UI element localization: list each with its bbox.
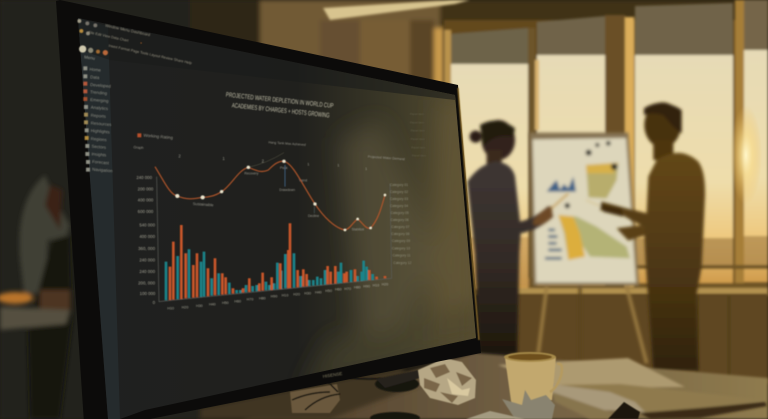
x axis labels: H40	[209, 303, 216, 307]
sidebar menu: Navigation	[92, 167, 113, 173]
x axis labels: H50	[222, 301, 229, 305]
x axis labels: H80	[354, 286, 361, 290]
right legend list: Category 05	[391, 211, 409, 215]
left background person	[0, 175, 72, 419]
monitor brand label: HISENSE	[322, 371, 343, 379]
screen dashboard content	[77, 19, 427, 311]
sidebar menu: Developed	[90, 82, 112, 89]
sun glare	[730, 105, 762, 205]
board bar chart	[547, 177, 576, 192]
y axis labels: 540 000	[139, 222, 156, 227]
x axis labels: H70	[344, 287, 351, 291]
orange bars	[170, 223, 385, 300]
sidebar menu: Forecast	[92, 159, 110, 166]
chart annotations: 1	[222, 156, 225, 161]
x axis labels: H10	[167, 307, 174, 311]
x axis labels: H20	[182, 305, 188, 309]
chart annotations: Recovery	[244, 171, 259, 175]
toolbar: •	[140, 40, 143, 46]
x axis labels: H20	[293, 292, 300, 296]
app sidebar	[80, 52, 120, 419]
board paper	[533, 138, 636, 283]
data points	[175, 160, 386, 231]
monitor	[56, 0, 481, 419]
right legend list: Category 03	[390, 197, 408, 201]
x axis labels: H90	[271, 295, 277, 299]
right legend list: Category 04	[390, 204, 408, 208]
chart annotations: Decline	[308, 214, 319, 218]
presentation board on easel	[529, 133, 647, 363]
sidebar menu: Emerging	[90, 97, 109, 104]
x axis labels: H70	[247, 298, 253, 302]
woman silhouette	[467, 120, 568, 354]
monitor bezel	[56, 0, 481, 419]
right legend list: Category 01	[390, 183, 408, 187]
chart annotations: Trend	[299, 179, 307, 183]
windows with sunset sky	[444, 0, 768, 296]
chart legend	[133, 133, 174, 150]
sidebar menu: Menu	[84, 54, 96, 61]
sidebar menu: Home	[89, 67, 102, 73]
sidebar menu: Sectors	[91, 144, 106, 150]
y axis labels: 360, 000	[138, 246, 156, 251]
chart annotations: 2	[262, 159, 265, 164]
x axis labels: H20	[382, 283, 388, 287]
desk surface	[240, 353, 768, 419]
trend line	[155, 161, 385, 230]
sidebar menu	[84, 54, 113, 173]
chart title	[225, 92, 334, 120]
crumpled paper small	[502, 390, 555, 419]
right panel faint list: Panel item	[411, 145, 426, 149]
upper map	[586, 163, 618, 198]
chart annotations: Drawdown	[279, 188, 295, 192]
chart annotations: Hang Tank Max Achieved	[268, 140, 306, 147]
board frame	[529, 133, 639, 286]
x axis labels: H10	[282, 294, 288, 298]
coffee cup	[504, 352, 562, 408]
easel legs	[538, 287, 647, 363]
toolbar: Window Menu Dashboard	[105, 23, 151, 37]
sidebar menu: Insights	[91, 151, 107, 158]
right legend list: Category 09	[392, 239, 410, 243]
y axis labels: 240 000	[139, 257, 156, 262]
lower wall	[510, 294, 768, 384]
toolbar: Insert Format Page Tools Layout Review Share Help	[108, 44, 192, 65]
chart title: ACADEMIES BY CHARGES + HOSTS GROWING	[231, 102, 330, 120]
y axis labels: 400 000	[139, 234, 156, 239]
chart annotations: Peak	[280, 166, 288, 170]
sidebar menu: Resources	[91, 120, 112, 127]
man silhouette	[586, 102, 705, 371]
right panel faint list	[410, 112, 427, 158]
teal bars	[166, 249, 373, 300]
chart annotations: Sustainable	[193, 201, 214, 207]
x axis labels: H30	[196, 304, 203, 308]
x axis labels: H60	[335, 288, 342, 292]
toolbar icons	[77, 19, 108, 55]
toolbar: File Edit View Data Chart	[88, 30, 129, 43]
x axis labels: H80	[259, 296, 266, 300]
lower map	[558, 215, 630, 260]
sidebar menu: Trending	[90, 89, 108, 96]
x axis labels: H60	[234, 300, 241, 304]
sidebar menu: Highlights	[91, 128, 110, 135]
ceiling light	[323, 0, 470, 20]
right legend list: Category 12	[393, 261, 412, 265]
axes	[157, 177, 392, 302]
y axis labels: 200, 000	[138, 280, 156, 285]
y axis labels: 100 000	[140, 291, 156, 296]
chart legend: Working Rating	[143, 133, 174, 140]
newspapers on desk	[498, 358, 767, 419]
y axis labels: 240 000	[136, 175, 153, 180]
sidebar menu: Reports	[91, 113, 106, 119]
left background table	[0, 307, 70, 330]
right legend list: Category 07	[391, 225, 410, 229]
x axis labels: H10	[373, 284, 379, 288]
x axis labels: H40	[315, 290, 322, 294]
y axis labels	[136, 175, 156, 305]
toolbar	[88, 23, 192, 65]
right legend list	[390, 183, 412, 265]
x axis labels: H30	[304, 291, 311, 295]
x axis labels	[167, 283, 388, 311]
right panel faint list: Panel item	[410, 120, 425, 124]
right legend list: Category 08	[391, 232, 410, 236]
y axis labels: 0	[153, 300, 156, 305]
right panel faint list: Panel item	[411, 137, 425, 141]
chart annotations: Stabilize	[352, 227, 364, 231]
sidebar menu: Regions	[91, 136, 107, 142]
board star markers	[565, 141, 618, 208]
chart annotations: 1	[337, 163, 340, 168]
right legend list: Category 06	[391, 218, 409, 222]
chart annotations	[178, 140, 405, 231]
y axis labels: 600 000	[138, 209, 154, 214]
board legend lines	[545, 230, 562, 258]
chart annotations: 1	[307, 162, 310, 167]
right legend list: Category 02	[390, 190, 408, 194]
x axis labels: H90	[363, 285, 370, 289]
monitor stand and cables	[290, 370, 420, 419]
crumpled paper ball	[418, 358, 476, 405]
keyboard corner	[466, 411, 525, 419]
y axis labels: 240 000	[139, 269, 156, 274]
dark object on papers	[608, 402, 640, 419]
right panel faint list: Panel item	[410, 112, 425, 116]
right panel faint list: Panel item	[412, 154, 427, 158]
orange object on table	[0, 292, 33, 304]
right panel faint list: Panel item	[411, 129, 425, 133]
right legend list: Category 10	[392, 246, 410, 250]
sidebar menu: Analytics	[91, 105, 108, 111]
chart annotations: 2	[178, 154, 181, 159]
sidebar icons	[83, 66, 90, 172]
bezel rim highlight	[458, 88, 479, 340]
sidebar darker top strip	[78, 18, 455, 100]
y axis labels: 400 000	[138, 198, 154, 203]
chart annotations: Projected Water Demand	[368, 155, 405, 161]
chart legend: Graph	[133, 145, 144, 150]
right legend list: Category 11	[393, 254, 411, 258]
desk shadow under monitor	[200, 368, 420, 419]
y axis labels: 200 000	[138, 186, 154, 191]
sidebar menu: Data	[90, 74, 100, 80]
chart annotations: 1	[365, 166, 368, 171]
screen light reflection	[308, 103, 475, 374]
monitor screen	[78, 18, 476, 419]
chart title: PROJECTED WATER DEPLETION IN WORLD CUP	[225, 92, 334, 110]
x axis labels: H50	[325, 289, 332, 293]
